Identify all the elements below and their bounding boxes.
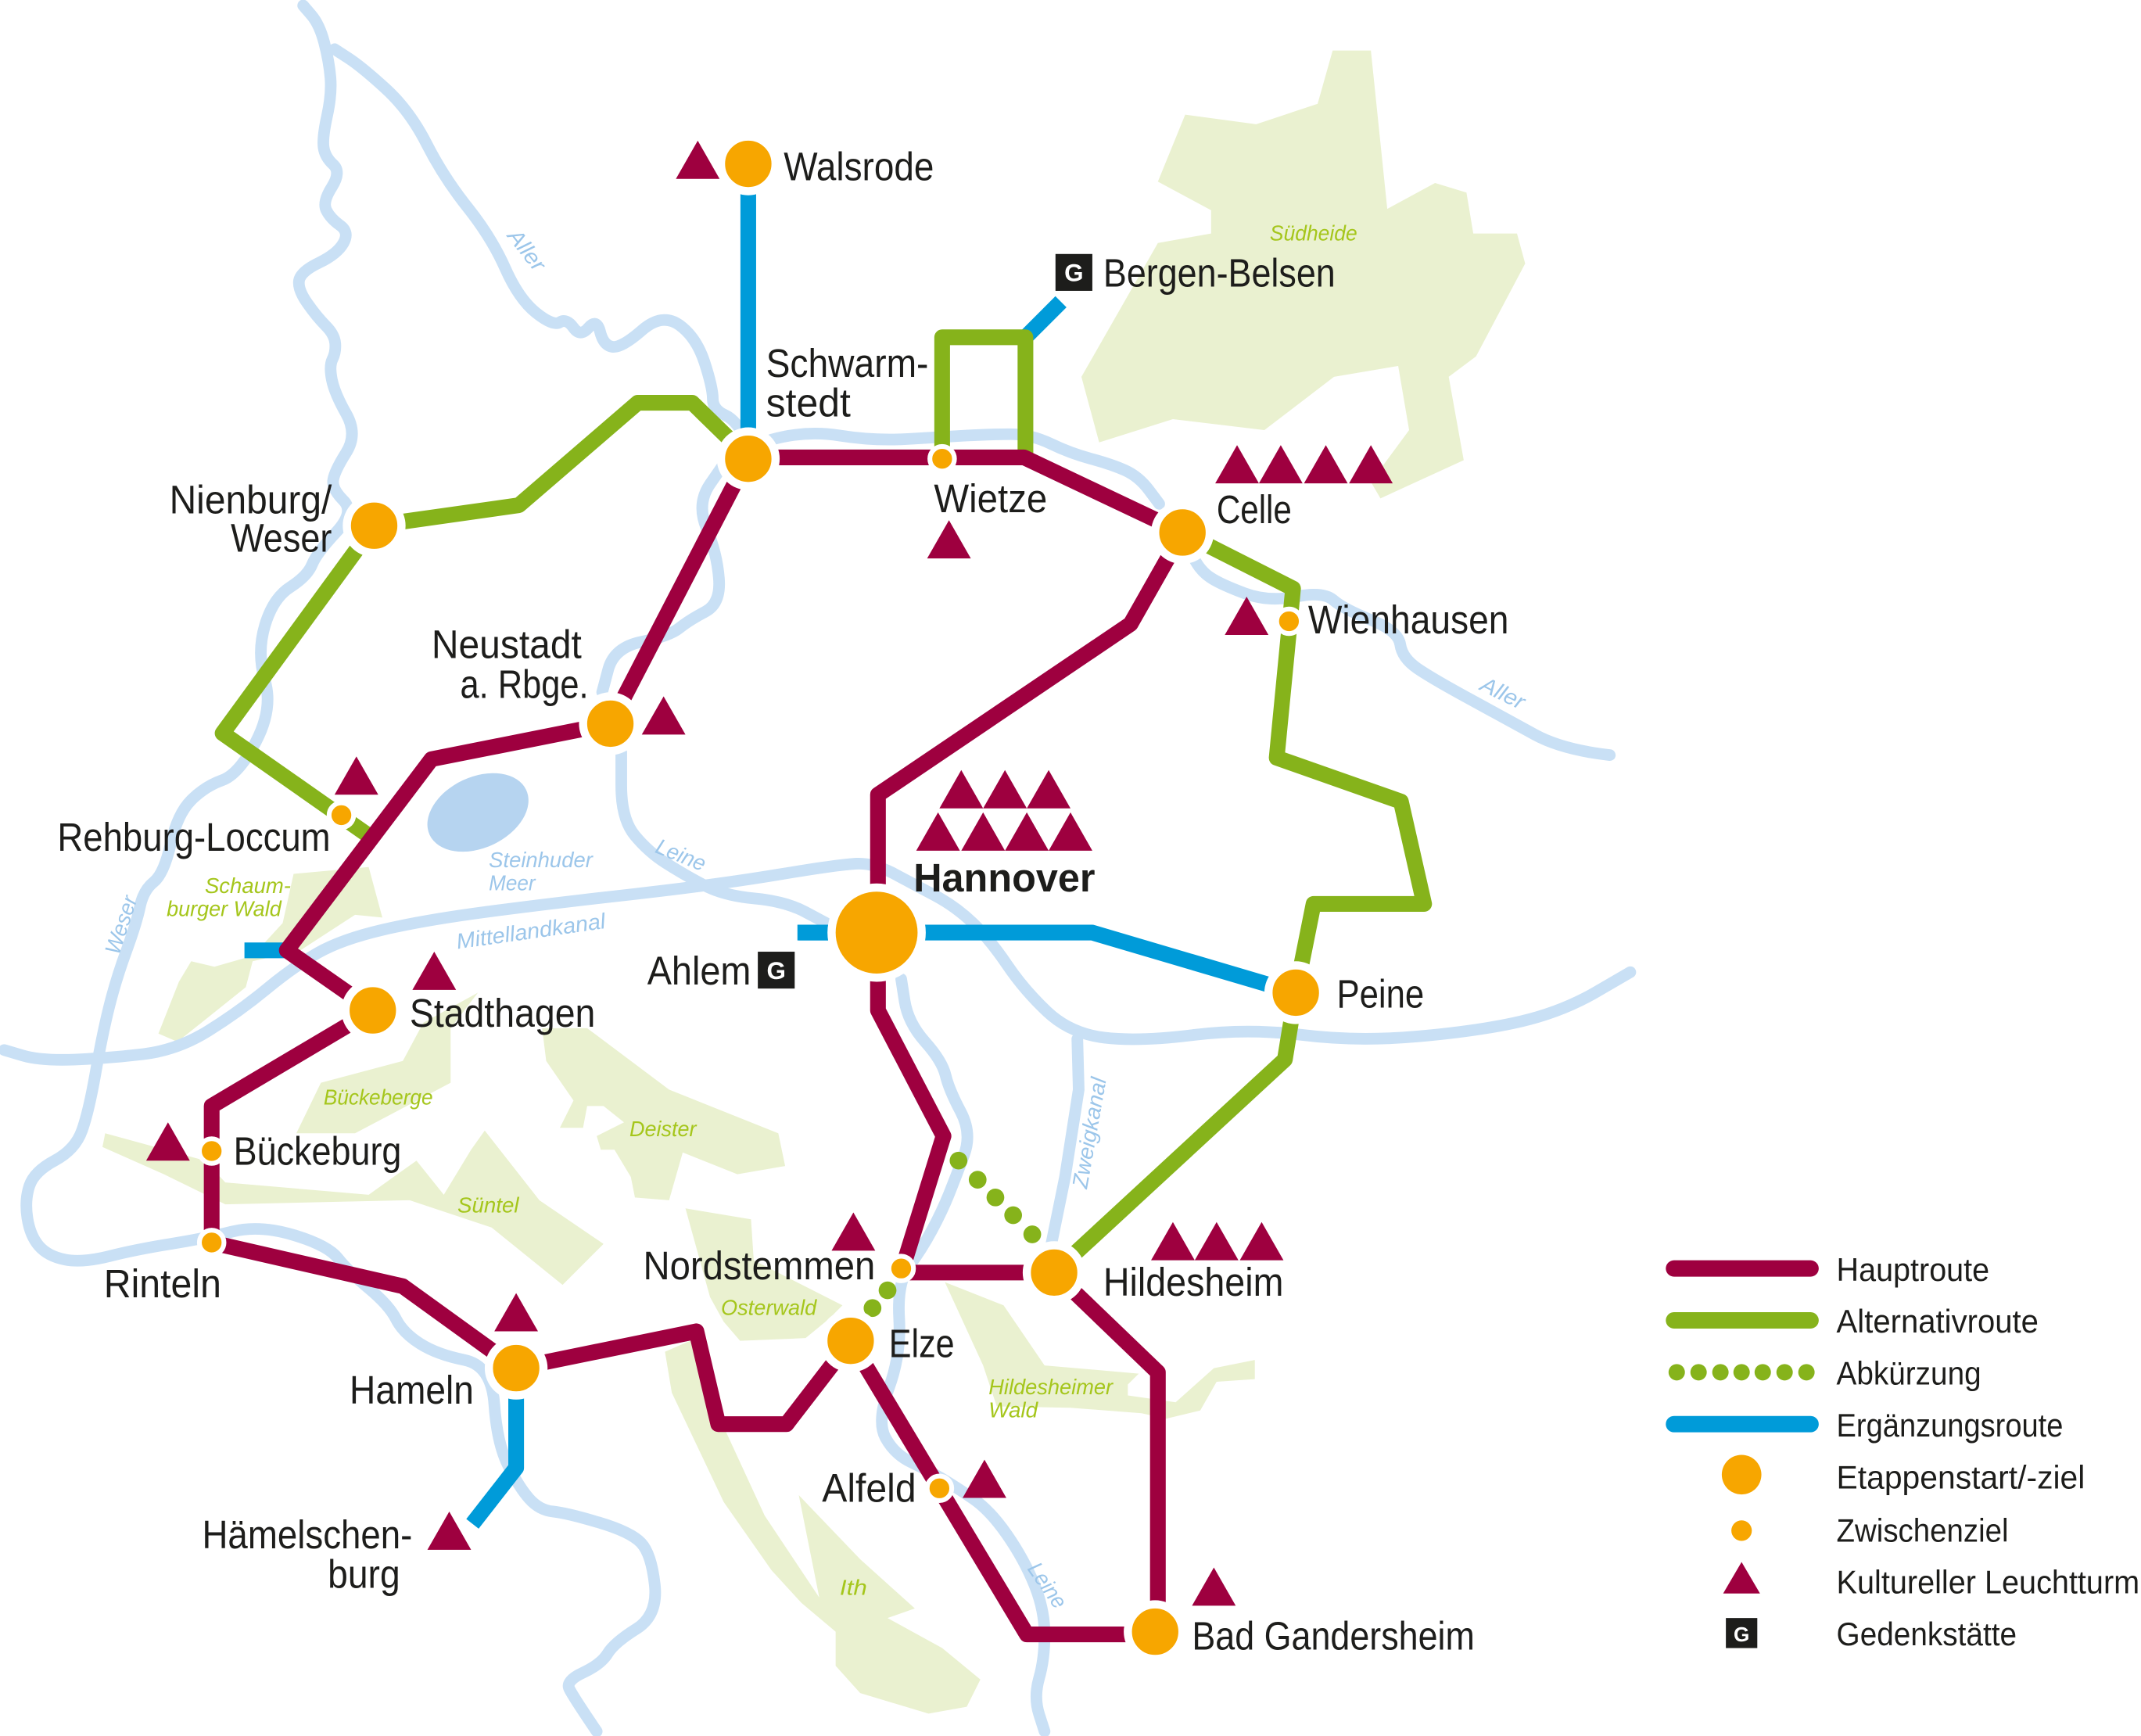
label: Südheide: Südheide [1270,221,1357,245]
stop: Bückeburg [199,1139,224,1164]
label: Süntel: Süntel [457,1193,519,1218]
cultural lighthouse triangles [146,141,1393,1605]
stop: Wienhausen [1277,609,1301,633]
icon: memorial Ahlem [758,952,794,988]
shortcut dots [863,1152,1041,1317]
city: Walsrode: Walsrode [784,144,934,188]
route: Mittellandkanal stub [245,946,289,955]
forest: Deister [542,1028,785,1200]
city: Nienburg/Weser: Weser [231,515,332,560]
stop: Walsrode [721,137,776,191]
route: Wietze loop [942,337,1025,457]
stop: Nordstemmen [889,1256,913,1281]
stop: Wietze [930,447,955,471]
label: Osterwald: Osterwald [721,1296,818,1320]
alternative routes [223,337,1424,1272]
legend: Abkürzung: Abkürzung [1837,1355,1981,1392]
region labels [100,221,1530,1613]
route: Ahlem round cap [798,928,833,937]
city: Schwarmstedt: Schwarm- [766,341,928,386]
legend: Etappenstart/-ziel: Etappenstart/-ziel [1837,1458,2085,1495]
route: Celle to Hildesheim [1054,533,1424,1272]
city: Bückeburg: Bückeburg [234,1128,401,1173]
city: Nordstemmen: Nordstemmen [643,1243,875,1288]
river: Aller east [772,433,1159,504]
stop: Rinteln [199,1230,224,1255]
rivers and canals [4,5,1630,1731]
city: Rehburg-Loccum: Rehburg-Loccum [57,815,331,859]
forest: Ith [665,1338,981,1713]
stop: Nienburg [347,498,401,553]
river: Weser [27,5,655,1731]
label: Aller north: Aller [502,223,551,277]
label: Zweigkanal: Zweigkanal [1067,1075,1111,1191]
label: Schaumburger Wald: Schaum- [205,873,291,898]
forest: Bückeberge [296,992,478,1133]
icon: memorial Bergen-Belsen [1056,254,1092,291]
canal: Zweigkanal [1052,1039,1078,1244]
stop: Hildesheim [1027,1245,1081,1300]
legend: Zwischenziel: Zwischenziel [1837,1512,2009,1548]
stop: Neustadt [583,697,637,751]
river: Aller south-east [1188,546,1610,755]
stop: Peine [1268,965,1323,1020]
river: Leine north [602,464,723,692]
legend: Zwischenziel [1731,1512,2009,1548]
city: Hildesheim: Hildesheim [1103,1260,1283,1304]
stops [199,137,1323,1659]
icon: memorial Bergen-Belsen: G [1064,260,1084,287]
forest: Süntel [102,1131,604,1285]
legend: Etappenstart/-ziel [1722,1454,2085,1495]
route: Nienburg to Schwarmstedt [374,403,748,525]
forest: Osterwald [686,1208,842,1341]
city: Neustadt a. Rbge.: a. Rbge. [460,662,589,706]
lake: Steinhuder Meer [414,758,541,867]
legend [1669,1251,2139,1652]
route: Hämelschenburg branch [472,1368,516,1524]
city: Nienburg/Weser: Nienburg/ [170,478,332,522]
river: Aller north [335,49,748,443]
icon: memorial Ahlem: G [766,957,786,985]
city: Wienhausen: Wienhausen [1308,597,1509,642]
legend: Alternativroute: Alternativroute [1837,1303,2039,1340]
stop: Schwarmstedt [721,432,776,486]
label: Mittellandkanal: Mittellandkanal [455,909,608,953]
canal: Mittellandkanal [4,863,1630,1060]
label: Ith: Ith [840,1575,867,1599]
label: Schaumburger Wald: burger Wald [167,897,282,921]
city: Schwarmstedt: stedt [766,381,851,425]
city: Alfeld: Alfeld [822,1466,916,1511]
city: Neustadt a. Rbge.: Neustadt [432,622,582,667]
city: Wietze: Wietze [934,476,1047,521]
label: Hildesheimer Wald: Hildesheimer [988,1375,1114,1399]
forest: Südheide [1081,51,1525,498]
city: Hämelschenburg: Hämelschen- [202,1512,412,1557]
city: Ahlem: Ahlem [647,949,751,993]
stop: Stadthagen [346,983,400,1038]
label: Deister: Deister [629,1117,698,1141]
city: Rinteln: Rinteln [104,1261,221,1306]
legend: Hauptroute: Hauptroute [1837,1251,1989,1288]
main route [212,457,1182,1634]
river: Leine south [882,979,1045,1731]
stop: Alfeld [927,1476,952,1501]
stop: Hameln [489,1341,543,1396]
city: Bad Gandersheim: Bad Gandersheim [1192,1613,1475,1658]
city: Stadthagen: Stadthagen [410,991,595,1035]
label: Leine north: Leine [652,834,709,876]
legend: Ergänzungsroute: Ergänzungsroute [1837,1407,2063,1444]
city: Hannover: Hannover [913,855,1095,900]
legend: Abkürzung [1669,1355,1981,1392]
stop: Hannover [831,888,922,977]
supplementary routes [245,164,1296,1524]
city labels [57,144,1509,1658]
stop: Rehburg-Loccum [329,803,353,827]
river: Leine middle [622,752,826,923]
city: Bergen-Belsen: Bergen-Belsen [1103,251,1336,296]
label: Aller east: Aller [1476,671,1530,715]
route: Ahlem to Peine [799,933,1296,992]
forest: Schaumburger Wald [159,867,382,1042]
label: Steinhuder Meer: Meer [489,870,536,895]
label: Bückeberge: Bückeberge [324,1085,433,1110]
stop: Bad Gandersheim [1128,1605,1182,1659]
label: Hildesheimer Wald: Wald [988,1397,1039,1422]
label: Leine south: Leine [1023,1558,1072,1613]
forest areas [102,51,1525,1713]
legend: Gedenkstätte: G [1734,1623,1749,1646]
city: Elze: Elze [889,1322,955,1366]
label: Weser: Weser [100,891,142,957]
stop: Celle [1155,505,1210,560]
city: Hämelschenburg: burg [328,1552,400,1597]
city: Hameln: Hameln [350,1368,474,1412]
route: Nienburg to Rehburg-Loccum [223,525,374,836]
city: Peine: Peine [1336,972,1424,1017]
label: Steinhuder Meer: Steinhuder [489,848,594,872]
forest: Hildesheimer Wald [945,1282,1255,1419]
route: Walsrode branch [744,164,753,457]
legend: Kultureller Leuchtturm [1723,1562,2139,1601]
stop: Elze [823,1314,878,1368]
city: Celle: Celle [1217,487,1292,532]
route: Bergen-Belsen branch [1025,302,1061,337]
legend: Gedenkstätte: Gedenkstätte [1837,1616,2017,1652]
legend: Gedenkstätte [1726,1616,2017,1652]
